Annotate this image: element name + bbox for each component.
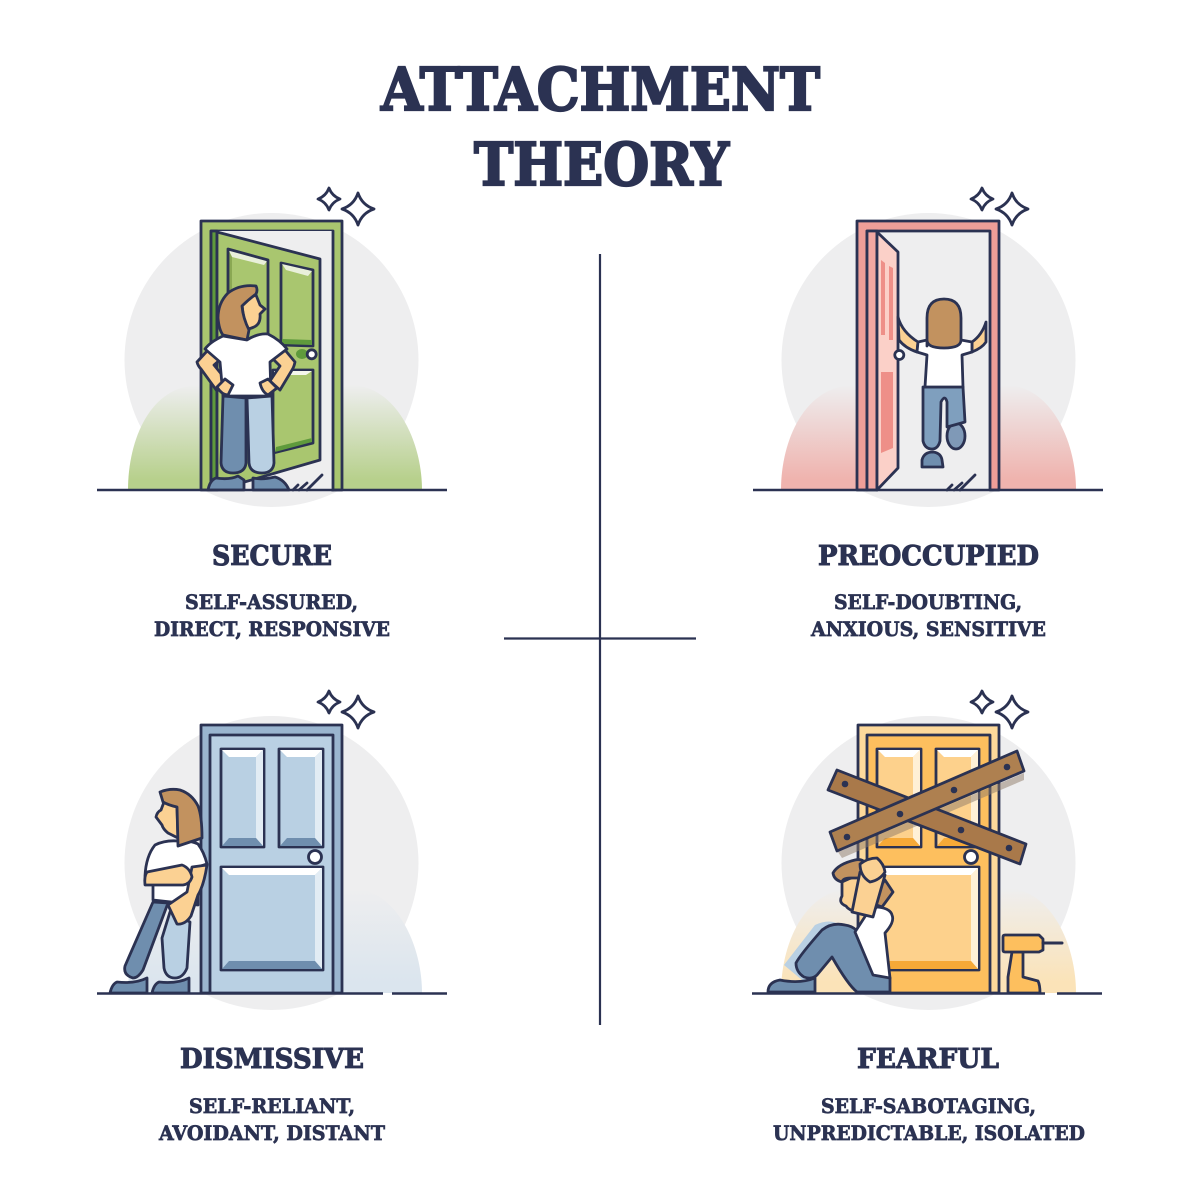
- label: preoccupied: PREOCCUPIED: [818, 541, 1039, 572]
- ground line: [97, 489, 447, 491]
- panel: preoccupied: [753, 188, 1103, 641]
- door panel top right: [936, 749, 979, 847]
- icon: sparkles: [318, 691, 374, 728]
- background circle: [124, 213, 418, 507]
- title: THEORY: [474, 130, 730, 199]
- label: dismissive: SELF-RELIANT,: [189, 1094, 355, 1118]
- icon: sparkles: [971, 188, 1028, 225]
- panel: fearful: [752, 691, 1102, 1145]
- ground line: [753, 489, 1103, 491]
- yellow hill: [781, 888, 1076, 993]
- floor scratch marks: [293, 475, 322, 490]
- icon: sparkles: [971, 691, 1028, 728]
- label: dismissive: AVOIDANT, DISTANT: [158, 1121, 385, 1145]
- background circle: [124, 716, 418, 1010]
- green hill: [128, 385, 422, 490]
- door panel top left: [221, 749, 264, 847]
- door panel top right: [279, 749, 323, 847]
- label: secure: SECURE: [212, 541, 332, 572]
- label: fearful: UNPREDICTABLE, ISOLATED: [773, 1121, 1085, 1145]
- label: dismissive: [158, 1044, 385, 1145]
- floor scratch marks: [947, 475, 975, 490]
- ground line: [97, 992, 447, 995]
- panel: dismissive: [97, 691, 447, 1145]
- label: secure: [154, 541, 390, 641]
- door panel top left: [877, 749, 921, 847]
- quadrant divider cross: [504, 254, 696, 1025]
- door panel bottom: [877, 867, 979, 970]
- label: fearful: FEARFUL: [857, 1044, 999, 1075]
- label: secure: DIRECT, RESPONSIVE: [154, 617, 390, 641]
- label: fearful: SELF-SABOTAGING,: [821, 1094, 1036, 1118]
- label: secure: SELF-ASSURED,: [185, 590, 358, 614]
- door panel bottom: [221, 867, 323, 970]
- closed yellow door: [858, 725, 999, 993]
- background circle: [782, 213, 1076, 507]
- crossed wooden boards: [828, 751, 1026, 864]
- label: fearful: [773, 1044, 1085, 1145]
- icon: power drill: [1003, 935, 1062, 993]
- title: ATTACHMENT: [380, 55, 820, 124]
- label: preoccupied: [810, 541, 1046, 641]
- figure: person sitting with hands on head: [768, 858, 893, 992]
- blue hill: [128, 888, 422, 993]
- figure: person with hands on hips: [197, 286, 295, 490]
- pink hill: [781, 385, 1076, 490]
- open green door: [201, 221, 342, 490]
- open pink door: [857, 221, 999, 490]
- background circle: [782, 716, 1076, 1010]
- figure: person walking through the door: [895, 299, 986, 467]
- label: preoccupied: SELF-DOUBTING,: [834, 590, 1022, 614]
- icon: sparkles: [318, 188, 374, 225]
- label: preoccupied: ANXIOUS, SENSITIVE: [810, 617, 1046, 641]
- closed blue door: [201, 725, 342, 993]
- label: dismissive: DISMISSIVE: [180, 1044, 364, 1075]
- figure: person leaning with crossed arms: [110, 789, 207, 993]
- panel: secure: [97, 188, 447, 641]
- title: [380, 55, 820, 199]
- ground line: [752, 992, 1102, 995]
